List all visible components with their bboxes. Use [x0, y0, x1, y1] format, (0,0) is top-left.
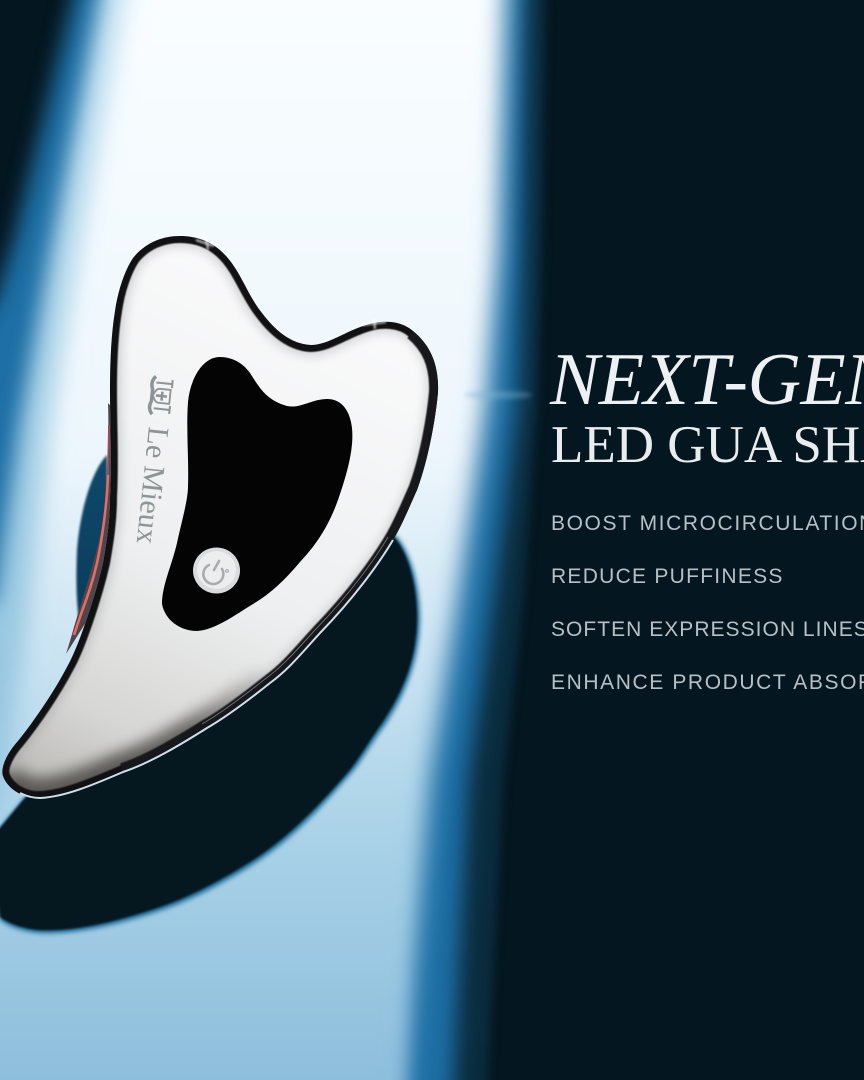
background: blue light band	[0, 0, 526, 1080]
black LED window	[162, 357, 352, 631]
lower edge highlight	[20, 540, 393, 798]
rim lower thick section	[123, 331, 438, 772]
body lower shading	[3, 683, 270, 798]
power button	[193, 548, 240, 594]
background: light glint near the heading	[464, 391, 532, 399]
red LED side strip	[66, 403, 115, 654]
device body	[2, 236, 438, 798]
brand name: Le Mieux	[130, 425, 175, 546]
body inner edge shading	[2, 236, 438, 798]
brand crest	[149, 376, 173, 416]
power icon	[203, 561, 228, 584]
device shadow: left lobe	[76, 455, 110, 620]
rim glint: right lobe	[362, 318, 386, 329]
device shadow: main	[0, 537, 417, 930]
rim silver reflection	[202, 537, 388, 724]
background: pale blue edge on the left of the beam	[0, 0, 400, 1080]
device shadow: blue halo	[0, 535, 420, 933]
background: bright light beam	[0, 0, 506, 1080]
benefit three: SOFTEN EXPRESSION LINES	[551, 618, 864, 641]
rim glint: top	[196, 236, 214, 250]
benefit two: REDUCE PUFFINESS	[551, 565, 784, 588]
title	[549, 339, 864, 474]
background: dark teal falloff on the right of the beam	[300, 0, 546, 1080]
metal rim	[2, 236, 438, 798]
gua sha device	[2, 236, 438, 798]
benefits list	[551, 512, 864, 694]
